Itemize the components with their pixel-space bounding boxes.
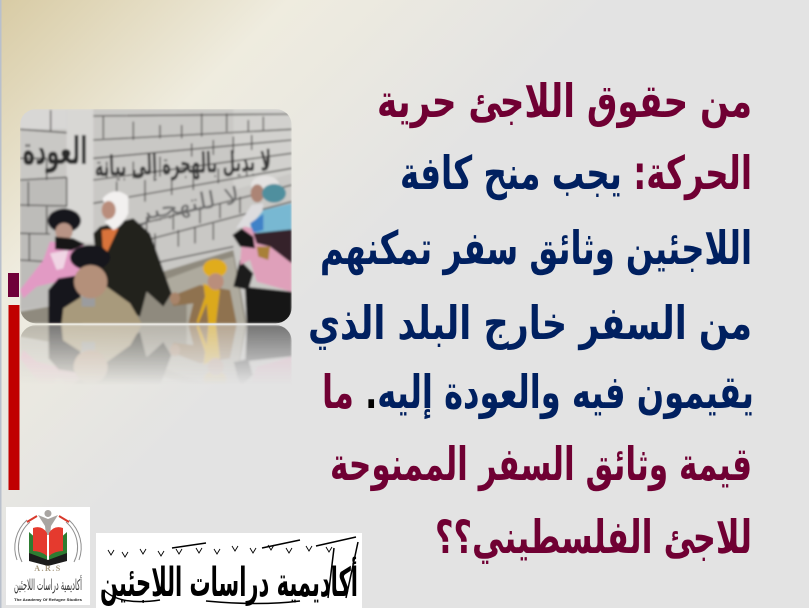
logo initials: A.R.S bbox=[34, 564, 62, 573]
accent bars bbox=[8, 273, 20, 490]
calligraphy sweeping strokes bbox=[104, 537, 358, 604]
maroon bar bbox=[8, 273, 19, 297]
text: أكاديمية دراسات اللاجئين bbox=[14, 575, 82, 594]
main Arabic text block bbox=[308, 74, 754, 564]
academy calligraphy banner bbox=[96, 533, 362, 608]
line 2: الحركة: يجب منح كافة bbox=[400, 146, 752, 200]
logo arcs bbox=[15, 520, 81, 562]
photo reflection bbox=[20, 325, 292, 381]
academy logo bbox=[6, 507, 90, 605]
calligraphy diacritic ticks bbox=[108, 545, 332, 557]
logo human figure bbox=[38, 510, 58, 535]
red bar bbox=[8, 305, 20, 490]
photo of refugee family by a graffiti wall bbox=[20, 109, 292, 323]
logo green and red accents bbox=[27, 516, 69, 522]
left edge strip bbox=[0, 0, 2, 608]
logo English name: The Academy Of Refugee Studies bbox=[14, 598, 82, 602]
logo book bbox=[29, 527, 67, 566]
calligraphy name: أكاديمية دراسات اللاجئين bbox=[100, 556, 358, 606]
